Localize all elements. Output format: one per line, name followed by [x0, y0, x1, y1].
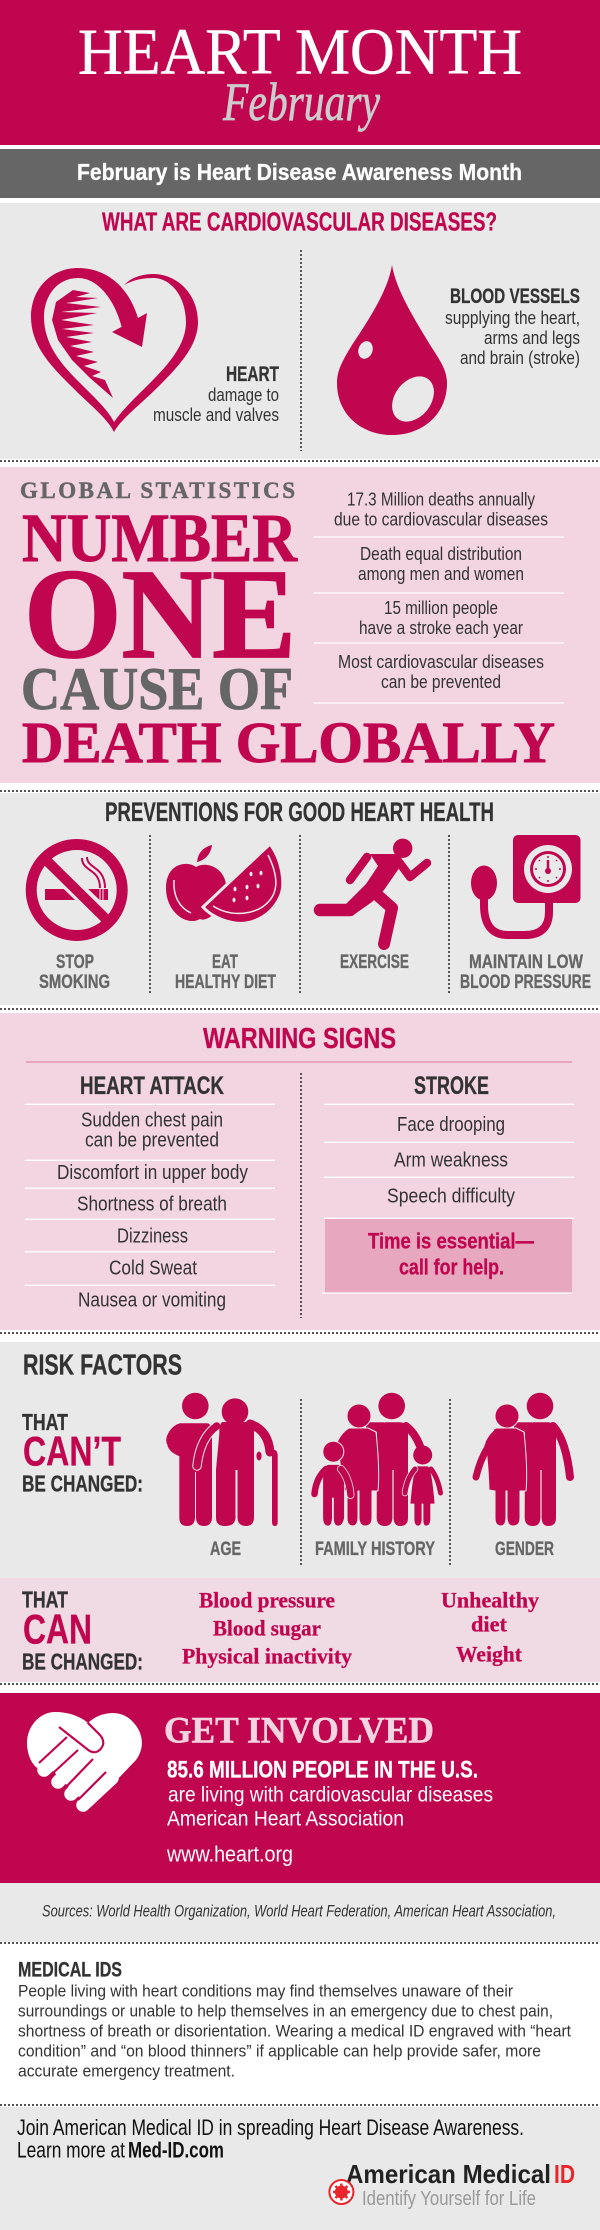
panel: risk factors: [0, 1342, 600, 1578]
list: stroke: Face drooping: [397, 1114, 505, 1136]
panel: warning signs: [0, 1013, 600, 1330]
list: changeable factors: Unhealthy: [441, 1588, 539, 1613]
list: heart attack: Sudden chest pain: [81, 1110, 223, 1132]
text block: medical IDs: condition” and “on blood thinners” if applicable can help provide safer, more: [18, 2042, 541, 2061]
text: heart: muscle and valves: [153, 405, 279, 425]
list: stroke: STROKE: [414, 1072, 489, 1100]
text: blood vessels: and brain (stroke): [460, 348, 580, 368]
icon: elderly couple (age): [166, 1393, 278, 1526]
text: blood pressure: [460, 952, 591, 993]
text: heart: [153, 363, 279, 425]
logo: American Medical ID: ID: [554, 2159, 575, 2189]
heading: get involved: GET INVOLVED: [164, 1710, 434, 1751]
icon: blood pressure gauge: [471, 835, 580, 935]
labels: age, family history, gender: FAMILY HISTORY: [315, 1539, 435, 1560]
icon: family: [314, 1393, 440, 1526]
text: that can be changed: CAN: [23, 1605, 92, 1652]
text: exercise: EXERCISE: [340, 952, 409, 973]
statistics list: [314, 490, 564, 703]
header banner: [0, 0, 600, 145]
icon: runner: [320, 839, 427, 944]
text: stop smoking: SMOKING: [39, 972, 110, 993]
logo: American Medical ID: American Medical: [346, 2159, 551, 2189]
headline: number one cause of death globally: [21, 500, 555, 775]
icon: couple (gender): [476, 1393, 570, 1526]
text: that can be changed: [22, 1587, 143, 1674]
panel: preventions: [0, 793, 600, 1005]
text: blood vessels: arms and legs: [484, 328, 580, 348]
list: heart attack: HEART ATTACK: [80, 1072, 224, 1100]
text: that can't be changed: BE CHANGED:: [22, 1471, 143, 1497]
text block: medical IDs: MEDICAL IDS: [18, 1959, 122, 1982]
callout: time is essential: [322, 1219, 572, 1293]
list: stroke: Arm weakness: [394, 1150, 508, 1172]
list: changeable factors: Physical inactivity: [182, 1644, 352, 1669]
list: heart attack: Shortness of breath: [77, 1194, 227, 1216]
logo: American Medical ID: Identify Yourself for Life: [362, 2188, 536, 2210]
heading: warning signs: WARNING SIGNS: [203, 1023, 396, 1055]
statistics list: Death equal distribution: [360, 544, 522, 564]
text: statistic: 85.6 MILLION PEOPLE IN THE U.S.: [167, 1756, 478, 1783]
list: stroke: [324, 1072, 574, 1218]
labels: age, family history, gender: GENDER: [495, 1539, 554, 1560]
panel: get involved: [0, 1693, 600, 1883]
sources: [0, 1883, 600, 1942]
text: that can't be changed: [22, 1409, 143, 1497]
logo: American Medical ID: [329, 2159, 575, 2210]
list: changeable factors: [182, 1588, 539, 1669]
text: eat healthy diet: EAT: [212, 952, 238, 973]
panel: risk factors that can be changed: [0, 1578, 600, 1682]
labels: age, family history, gender: [210, 1539, 554, 1560]
list: stroke: Speech difficulty: [387, 1186, 515, 1208]
labels: age, family history, gender: AGE: [210, 1539, 241, 1560]
text: heart: HEART: [226, 363, 279, 386]
text: eat healthy diet: HEALTHY DIET: [175, 972, 276, 993]
headline: number one cause of death globally: ONE: [24, 543, 296, 685]
text: that can't be changed: THAT: [22, 1409, 68, 1435]
statistics list: can be prevented: [381, 672, 501, 692]
statistics list: 15 million people: [384, 598, 498, 618]
headline: number one cause of death globally: DEATH GLOBALLY: [22, 710, 555, 775]
list: heart attack: [25, 1072, 275, 1312]
icon: no smoking: [31, 844, 122, 936]
list: heart attack: Nausea or vomiting: [78, 1290, 226, 1312]
headline: number one cause of death globally: CAUSE OF: [21, 656, 293, 722]
subtitle: February: February: [222, 72, 380, 132]
callout: time is essential: call for help.: [399, 1254, 504, 1279]
statistics list: Most cardiovascular diseases: [338, 652, 544, 672]
list: changeable factors: diet: [471, 1612, 508, 1637]
statistics list: 17.3 Million deaths annually: [347, 490, 535, 510]
headline: number one cause of death globally: NUMBER: [22, 500, 298, 576]
text: statistic: are living with cardiovascular diseases: [168, 1784, 493, 1807]
list: changeable factors: Blood sugar: [213, 1616, 321, 1641]
text: that can't be changed: CAN’T: [23, 1428, 121, 1475]
text: heart: damage to: [208, 385, 279, 405]
list: changeable factors: Weight: [456, 1642, 523, 1667]
text: eat healthy diet: [175, 952, 276, 993]
statistics list: have a stroke each year: [359, 618, 523, 638]
icon: blood drop: [337, 265, 447, 435]
text: that can be changed: THAT: [22, 1587, 68, 1613]
text: that can be changed: BE CHANGED:: [22, 1648, 143, 1674]
list: heart attack: can be prevented: [85, 1130, 219, 1152]
text: stop smoking: [39, 952, 110, 993]
panel: footer: [0, 2107, 600, 2230]
text: call to action: Med-ID.com: [128, 2138, 224, 2163]
panel: global statistics: [0, 467, 600, 783]
list: heart attack: Discomfort in upper body: [57, 1162, 248, 1184]
list: heart attack: Cold Sweat: [109, 1257, 197, 1279]
awareness banner: February is Heart Disease Awareness Month: [77, 159, 522, 185]
text: call to action: Learn more at: [17, 2138, 125, 2163]
awareness banner: [0, 149, 600, 198]
panel: what are cardiovascular diseases: [0, 203, 600, 459]
text block: medical IDs: [18, 1959, 571, 2081]
text block: medical IDs: surroundings or unable to help themselves in an emergency due to chest pain,: [18, 2002, 553, 2021]
text block: medical IDs: accurate emergency treatment.: [18, 2062, 235, 2081]
icon: apple and watermelon: [166, 844, 283, 923]
callout: time is essential: Time is essential—: [368, 1228, 534, 1253]
heading: risk factors: RISK FACTORS: [23, 1349, 182, 1381]
icon: heart with arrow: [31, 268, 198, 432]
text: stop smoking: STOP: [56, 952, 94, 973]
statistics list: due to cardiovascular diseases: [334, 510, 548, 530]
text: statistic: www.heart.org: [166, 1842, 293, 1867]
title: HEART MONTH: [78, 16, 522, 88]
heading: global statistics: GLOBAL STATISTICS: [20, 478, 295, 503]
icon: heart handshake: [27, 1712, 142, 1806]
text: statistic: [166, 1756, 493, 1867]
text: blood vessels: [445, 285, 580, 368]
list: heart attack: Dizziness: [117, 1226, 188, 1248]
text: call to action: [17, 2115, 524, 2163]
statistics list: among men and women: [358, 564, 524, 584]
text: statistic: American Heart Association: [167, 1808, 404, 1831]
list: changeable factors: Blood pressure: [199, 1588, 335, 1613]
text block: medical IDs: People living with heart conditions may find themselves unaware of their: [18, 1982, 513, 2001]
text: blood vessels: supplying the heart,: [445, 308, 580, 328]
